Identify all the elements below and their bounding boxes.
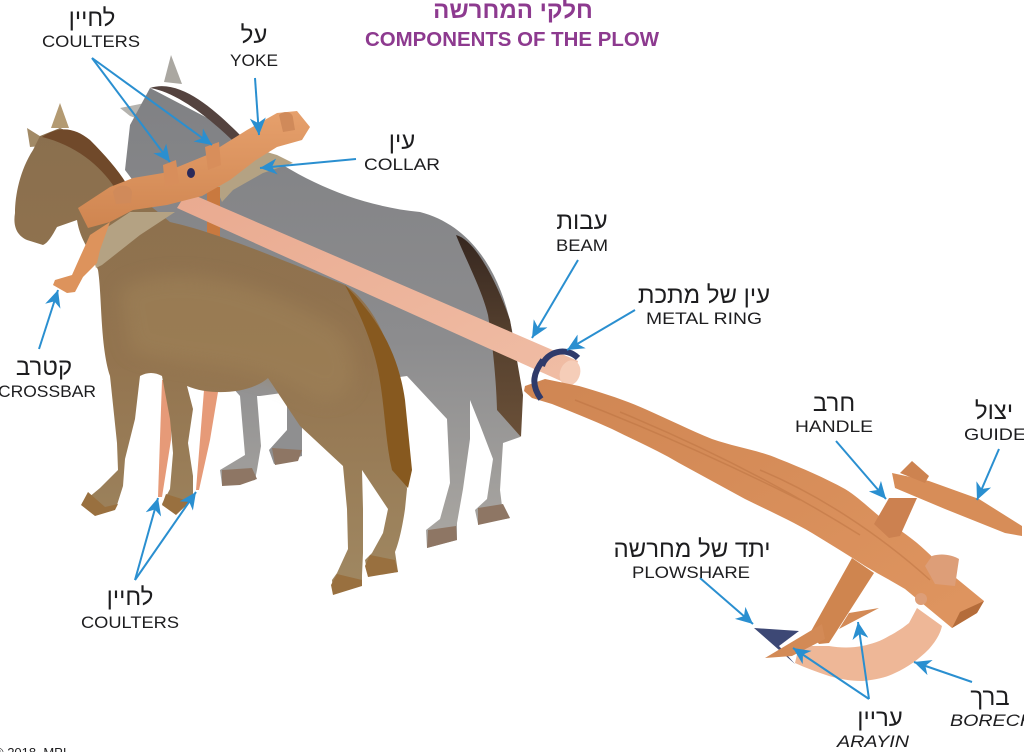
arrow: plowshare (700, 578, 753, 624)
gray horse hooves (222, 448, 510, 548)
borech curve (795, 608, 942, 681)
coulter pole left (158, 380, 172, 497)
label: coulters bottom: לחיין (107, 584, 153, 611)
arrow: collar (260, 159, 356, 168)
plowshare (754, 628, 799, 664)
label: beam: עבות (556, 208, 608, 235)
arrow: coulters bottom left (135, 498, 158, 580)
gray horse far leg (269, 405, 302, 464)
yoke hole (187, 168, 195, 178)
brown horse hooves (81, 492, 398, 595)
guide peg (900, 461, 929, 483)
arayin fins (765, 624, 825, 658)
label: collar: COLLAR (364, 155, 440, 174)
arrow: handle (836, 441, 886, 499)
coulter pole right (196, 390, 218, 490)
label: coulters top (42, 5, 140, 51)
beam end cap (556, 357, 584, 389)
collar: gray horse (215, 150, 293, 202)
label: metal ring: עין של מתכת (638, 282, 770, 309)
label: crossbar: CROSSBAR (0, 382, 96, 401)
arrow: guide (977, 449, 999, 500)
arrow: yoke (255, 78, 259, 135)
guide (892, 473, 1022, 536)
arrow: arayin right (858, 622, 869, 699)
label: collar: עין (389, 128, 415, 155)
label: coulters bottom (81, 584, 179, 632)
gray horse body (125, 88, 522, 548)
label: borech: BORECH (950, 711, 1024, 730)
label: crossbar: קטרב (16, 354, 72, 381)
label: arayin: ARAYIN (836, 732, 910, 751)
brown horse shading (120, 276, 354, 399)
brown horse ears (51, 103, 69, 128)
arrow: coulters top left (92, 58, 170, 162)
yoke and crossbar (53, 111, 310, 293)
title: COMPONENTS OF THE PLOW (365, 29, 659, 51)
pole under yoke (207, 187, 220, 240)
label: collar (364, 128, 440, 174)
label: handle (795, 390, 873, 436)
label: coulters bottom: COULTERS (81, 613, 179, 632)
label: metal ring (638, 282, 770, 328)
plow body (524, 379, 1022, 681)
yoke pegs (113, 186, 132, 204)
label: arayin (836, 705, 910, 751)
label: plowshare: PLOWSHARE (632, 563, 750, 582)
label: crossbar (0, 354, 96, 401)
label: guide: יצול (975, 398, 1013, 425)
metal ring (534, 352, 578, 399)
label: borech: ברך (970, 684, 1010, 711)
label: handle: חרב (813, 390, 855, 417)
beam (177, 192, 584, 389)
gray horse ear (164, 55, 182, 84)
label: coulters top: לחיין (69, 5, 115, 32)
plow main beam (524, 379, 984, 628)
yoke bar (78, 111, 310, 228)
horse: gray (rear) (120, 55, 523, 548)
label: guide (964, 398, 1024, 444)
label: plowshare: יתד של מחרשה (613, 536, 771, 563)
arrow: coulters bottom right (135, 492, 196, 580)
arrow: beam (532, 260, 578, 338)
brown horse tail (345, 285, 412, 488)
label: handle: HANDLE (795, 417, 873, 436)
gray horse mane (150, 86, 240, 140)
arrow: crossbar (39, 290, 58, 349)
title (365, 0, 659, 51)
label: arayin: עריין (857, 705, 903, 732)
crossbar arm (53, 222, 110, 293)
label: beam (556, 208, 608, 255)
brown horse body (14, 128, 407, 594)
label: borech (950, 684, 1024, 730)
label: guide: GUIDE (964, 425, 1024, 444)
arrow: arayin left (793, 648, 869, 699)
arrow: metal ring (567, 310, 635, 350)
knob (925, 555, 959, 586)
label: yoke: YOKE (230, 51, 278, 70)
label: metal ring: METAL RING (646, 309, 762, 328)
plow beam end (952, 601, 984, 628)
brown horse mane (42, 129, 126, 188)
small peg (915, 593, 927, 605)
arrow: coulters top right (92, 58, 212, 145)
label: beam: BEAM (556, 236, 608, 255)
label: yoke: על (241, 22, 267, 49)
horse: brown (front) (14, 103, 412, 595)
coulter poles (158, 187, 220, 497)
label: plowshare (613, 536, 771, 582)
collar: brown horse (88, 212, 175, 268)
plow stem (810, 558, 874, 644)
label: yoke (230, 22, 278, 70)
handle (874, 498, 917, 538)
label: coulters top: COULTERS (42, 32, 140, 51)
gray horse tail (456, 235, 523, 437)
arrow: borech (914, 662, 972, 682)
